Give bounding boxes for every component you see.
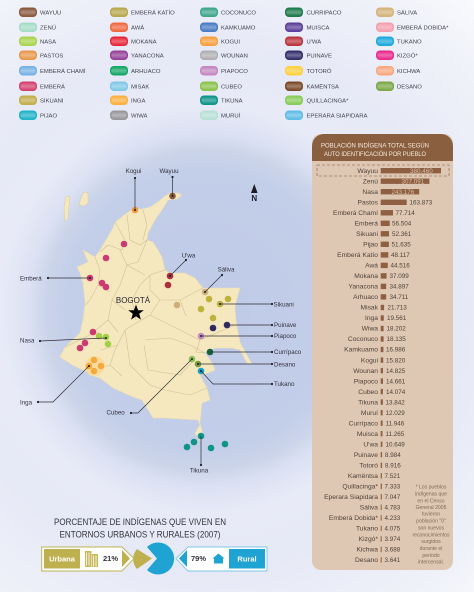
legend column 5: KICHWA xyxy=(397,69,420,75)
map labels: Wayuu xyxy=(159,168,179,175)
map: Inga halo xyxy=(85,356,105,376)
map: islands xyxy=(64,192,88,222)
map: Piapoco dot xyxy=(198,333,204,339)
map of Colombia xyxy=(60,192,252,451)
bar chart: people names: Totoró xyxy=(359,462,378,470)
banner: urban xyxy=(42,547,134,571)
legend column 3: KOGUI xyxy=(221,39,240,45)
legend column 1 xyxy=(19,8,86,120)
legend column 3: COCONUCO xyxy=(221,10,256,16)
legend column 1: EMBERÁ CHAMÍ xyxy=(40,68,86,75)
bar chart: people names: Misak xyxy=(361,305,379,312)
bar chart: values beside bars: 163.873 xyxy=(410,200,433,206)
legend column 3: MURUÍ xyxy=(221,112,241,119)
title: urban and rural percentage: ENTORNOS URBANOS Y RURALES (2007) xyxy=(60,530,220,540)
legend column 1: PASTOS xyxy=(40,53,63,59)
legend column 4: KAMËNTSA xyxy=(306,83,339,90)
bar chart: values inside bars xyxy=(392,168,433,196)
bar chart: people names: Emberá Katío xyxy=(337,252,378,259)
legend column 5: KIZGÓ* xyxy=(397,52,418,59)
map labels: Tukano xyxy=(274,381,295,388)
bar chart: people names: Mokana xyxy=(354,273,378,280)
icon: north arrow: N xyxy=(251,194,257,203)
legend column 2: MOKANA xyxy=(131,39,157,45)
bar chart: values beside bars: 16.986 xyxy=(386,347,406,354)
legend column 3: TIKUNA xyxy=(221,98,243,104)
map labels xyxy=(20,168,302,474)
map labels: Kogui xyxy=(126,168,141,175)
bar chart: values beside bars: 14.074 xyxy=(386,389,406,396)
bar chart: people names: Muruí xyxy=(361,410,378,417)
map labels: U'wa xyxy=(182,252,196,260)
legend column 3 xyxy=(200,8,256,120)
bar chart: values beside bars: 8.984 xyxy=(385,452,401,459)
bar chart: values beside bars: 44.516 xyxy=(390,263,410,270)
legend column 2 xyxy=(110,8,175,120)
legend column 4: CURRIPACO xyxy=(306,10,342,16)
map: Desano dot xyxy=(195,361,201,367)
legend column 4: PUINAVE xyxy=(306,53,332,59)
legend column 4 xyxy=(285,8,367,120)
footnote: intercensal. xyxy=(418,560,444,566)
map: Puinave dots xyxy=(210,322,230,331)
bar chart: values beside bars: 7.521 xyxy=(384,473,401,480)
map labels: Desano xyxy=(274,362,296,368)
legend column 5: SÁLIVA xyxy=(397,9,417,16)
legend column 1: NASA xyxy=(40,39,56,45)
bar chart: people names: Coconuco xyxy=(348,336,378,343)
footnote: son nuevos xyxy=(418,526,444,532)
map: Currípaco dot xyxy=(207,349,213,355)
bar chart: people names: Piapoco xyxy=(354,378,378,385)
legend column 5: DESANO xyxy=(397,84,422,90)
banner: rural: 79% xyxy=(191,554,206,563)
bar chart: values inside bars: 243.176 xyxy=(392,189,415,196)
map labels: Cubeo xyxy=(106,410,125,416)
map labels: Piapoco xyxy=(274,333,297,340)
map: mainland xyxy=(60,193,252,441)
icon: buildings xyxy=(85,551,98,567)
panel: population by people xyxy=(312,134,453,570)
footnote: * Los pueblos xyxy=(416,484,447,490)
bar chart: people names: U'wa xyxy=(363,441,378,448)
bar chart: people names: Emberá xyxy=(355,220,378,228)
icon: capital star xyxy=(128,304,144,320)
legend column 5: TUKANO xyxy=(397,39,422,45)
bar chart: values beside bars: 3.688 xyxy=(384,547,401,554)
banner: rural: Rural xyxy=(237,554,257,564)
banner: rural xyxy=(176,547,267,571)
bar chart: values beside bars: 34.711 xyxy=(390,294,409,301)
bar chart: values beside bars: 11.946 xyxy=(386,420,405,427)
bar chart: people names: Sáliva xyxy=(360,504,378,512)
bar chart: values beside bars: 13.842 xyxy=(386,399,405,406)
bar chart: people names: Emberá Dobida* xyxy=(329,515,378,522)
legend column 2: ARHUACO xyxy=(131,69,161,75)
map labels: Tikuna xyxy=(190,468,209,474)
legend column 3: CUBEO xyxy=(221,84,242,90)
map labels: Sikuani xyxy=(274,302,294,308)
map: Inga dots xyxy=(86,357,104,374)
map labels: Emberá xyxy=(20,276,42,282)
map: Kogui dot xyxy=(132,207,138,213)
bar chart: people names: Pastos xyxy=(358,200,379,206)
legend column 4: U'WA xyxy=(306,39,321,45)
bar chart: values beside bars: 7.047 xyxy=(384,494,401,501)
bar chart: values beside bars: 21.713 xyxy=(388,305,407,312)
map labels: Inga xyxy=(20,400,33,406)
legend column 5: EMBERÁ DOBIDA* xyxy=(397,24,449,31)
bar chart: people names: Kamkuamo xyxy=(344,347,378,354)
legend column 4: EPERARA SIAPIDARA xyxy=(306,113,367,119)
legend column 2: MISAK xyxy=(131,84,149,90)
map: Tikuna dots xyxy=(184,433,228,451)
title: urban and rural percentage xyxy=(54,517,226,540)
footnote: surgidos xyxy=(421,539,441,545)
bar chart: people names: Wiwa xyxy=(362,326,378,333)
bar chart: bars xyxy=(381,168,441,563)
map: Tukano dot xyxy=(198,368,204,374)
bar chart: people names: Kamëntsa xyxy=(348,473,378,480)
legend: indigenous peoples colour key xyxy=(19,8,449,120)
bar chart: people names: Nasa xyxy=(362,189,378,196)
panel header xyxy=(312,134,453,161)
map labels: Sáliva xyxy=(218,266,235,274)
map leader lines with arrow tips xyxy=(37,176,273,466)
bar chart: values beside bars: 4.783 xyxy=(384,504,401,512)
bar chart: people names: Kichwa xyxy=(356,547,378,554)
map: Wayuu dot xyxy=(169,193,176,199)
bar chart: values beside bars: 14.825 xyxy=(386,368,406,375)
bar chart: values beside bars: 51.635 xyxy=(392,242,411,248)
bar chart: values inside bars: 307.091 xyxy=(402,178,425,185)
bar chart: values beside bars: 18.135 xyxy=(386,336,406,343)
bar chart: people names: Pijao xyxy=(363,242,378,248)
banner: urban: Urbana xyxy=(49,554,76,564)
legend column 4: TOTORÓ xyxy=(306,68,332,75)
map: Nasa dots xyxy=(96,333,111,347)
icon: house xyxy=(212,554,224,564)
bar chart: people names: Kizgó* xyxy=(359,536,378,543)
map: department boundaries xyxy=(65,210,235,395)
bar chart: values beside bars: 19.561 xyxy=(387,315,407,322)
panel header: POBLACIÓN INDÍGENA TOTAL SEGÚN xyxy=(321,140,429,150)
bar chart: people names: Inga xyxy=(365,315,378,322)
bar chart: people names: Wayuu xyxy=(357,168,378,175)
map: Sáliva dots xyxy=(174,289,208,308)
footnote: período xyxy=(422,553,440,559)
footnote: tuvieron xyxy=(422,512,440,518)
bar chart: people names: Tikuna xyxy=(358,399,378,406)
footnote: población "0" xyxy=(416,518,446,524)
bar chart: people names: Quillacinga* xyxy=(342,484,378,490)
bar chart: people names xyxy=(324,168,379,564)
bar chart: values inside bars: 380.460 xyxy=(410,168,433,175)
legend column 1: SIKUANI xyxy=(40,98,64,104)
bar chart: values beside bars: 56.504 xyxy=(392,220,412,228)
legend column 1: PIJAO xyxy=(40,113,57,119)
bar chart: people names: Muisca xyxy=(357,431,378,438)
map: U'wa dots xyxy=(165,273,173,288)
map: Emberá dots xyxy=(77,241,127,351)
legend column 4: MUISCA xyxy=(306,25,329,31)
bar chart: values beside bars: 52.361 xyxy=(392,231,412,238)
bar chart: values beside bars: 48.117 xyxy=(391,252,410,259)
bar chart: people names: Currípaco xyxy=(349,420,378,427)
legend column 2: AWÁ xyxy=(131,24,144,31)
legend column 2: WIWA xyxy=(131,113,148,119)
bar chart: people names: Sikuani xyxy=(356,231,379,238)
bar chart: people names: Desano xyxy=(355,557,378,564)
panel header: AUTO IDENTIFICACIÓN POR PUEBLO xyxy=(324,149,426,158)
bar chart: values beside bars: 34.897 xyxy=(390,284,409,291)
footnote: durante el xyxy=(420,546,442,552)
legend column 2: YANACONA xyxy=(131,53,164,59)
bar chart: values beside bars: 18.202 xyxy=(386,326,406,333)
footnote xyxy=(412,484,450,566)
legend column 1: ZENÚ xyxy=(40,24,56,31)
bar chart: people names: Tukano xyxy=(356,526,378,533)
bar chart: people names: Awá xyxy=(365,263,378,270)
legend column 3: PIAPOCO xyxy=(221,69,248,75)
highlight box: Wayuu xyxy=(317,165,449,176)
bar chart: values beside bars: 14.661 xyxy=(386,378,406,385)
capital label: Bogotá: BOGOTÁ xyxy=(116,296,151,305)
footnote: General 2005 xyxy=(416,505,447,511)
legend column 2: INGA xyxy=(131,98,145,104)
map: Cubeo dot xyxy=(189,356,195,362)
map labels: Currípaco xyxy=(274,349,302,356)
panel background xyxy=(312,134,453,570)
legend column 2: EMBERÁ KATÍO xyxy=(131,9,175,16)
bar chart: values beside bars: 3.641 xyxy=(384,557,401,564)
footnote: en el Censo xyxy=(417,498,445,504)
icon: north arrow xyxy=(251,184,258,203)
bar chart: people names: Wounan xyxy=(353,368,378,375)
map labels: Puinave xyxy=(274,322,297,329)
banner: urban: 21% xyxy=(103,554,118,563)
bar chart: people names: Kogui xyxy=(361,357,379,364)
bar chart: values beside bars: 8.916 xyxy=(385,462,401,470)
footnote: reconocimientos xyxy=(412,532,450,538)
bar chart: values beside bars: 37.099 xyxy=(390,273,409,280)
bar chart: values beside bars: 7.333 xyxy=(384,484,401,490)
legend column 3: WOUNAN xyxy=(221,53,248,59)
map: Sikuani dots xyxy=(198,296,231,321)
bar chart: values beside bars: 15.820 xyxy=(386,357,406,364)
bar chart: values beside bars: 4.233 xyxy=(384,515,401,522)
bar chart: people names: Arhuaco xyxy=(353,294,378,301)
bar chart: values beside bars: 10.649 xyxy=(386,441,405,448)
bar chart: values beside bars: 11.265 xyxy=(386,431,405,438)
bar chart: values beside bars: 4.075 xyxy=(384,526,401,533)
legend column 5 xyxy=(376,8,449,91)
title: urban and rural percentage: PORCENTAJE DE INDÍGENAS QUE VIVEN EN xyxy=(54,517,226,527)
bar chart: values beside bars xyxy=(384,200,433,564)
bar chart: values beside bars: 77.714 xyxy=(396,210,415,217)
map labels: Nasa xyxy=(20,338,35,344)
pie chart: urban and rural share xyxy=(133,542,174,574)
legend column 4: QUILLACINGA* xyxy=(306,98,349,104)
legend column 1: EMBERÁ xyxy=(40,83,65,90)
bar chart: people names: Eperara Siapidara xyxy=(324,494,378,501)
bar chart: values beside bars: 12.029 xyxy=(386,410,405,417)
legend column 3: KAMKUAMO xyxy=(221,25,256,31)
bar chart: people names: Yanacona xyxy=(348,284,378,291)
bar chart: people names: Emberá Chamí xyxy=(333,210,378,217)
bar chart: people names: Zenú xyxy=(363,178,378,185)
bar chart: values beside bars: 3.974 xyxy=(384,536,401,543)
bar chart: people names: Puinave xyxy=(354,452,378,459)
footnote: indígenas que xyxy=(415,492,447,498)
legend column 1: WAYUU xyxy=(40,10,61,16)
bar chart: people names: Cubeo xyxy=(358,389,378,396)
